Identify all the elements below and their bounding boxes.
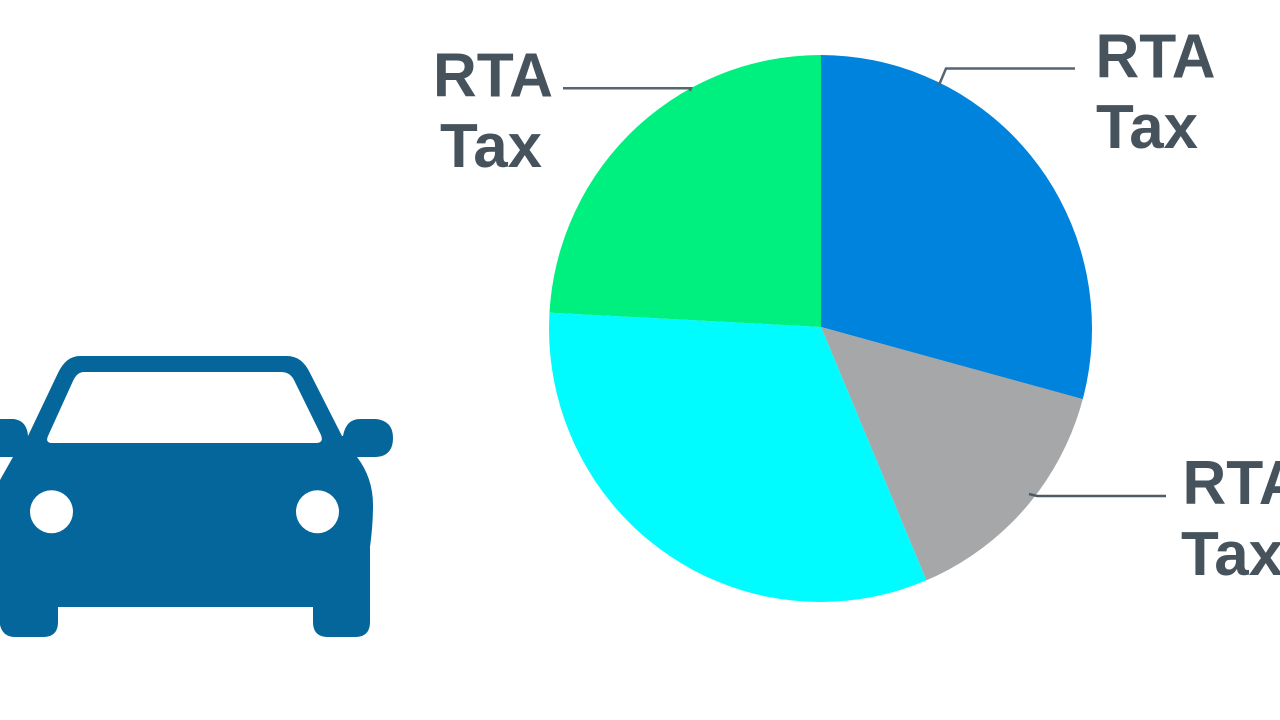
slice: green (550, 55, 821, 327)
label: top left: Tax (440, 112, 543, 181)
label: top right: RTA (1096, 22, 1216, 91)
label: bottom right (1181, 449, 1280, 589)
label: top left: RTA (433, 42, 553, 110)
leader line: top right (939, 68, 1075, 85)
icon: car (0, 356, 393, 637)
slice: gray (821, 327, 1083, 580)
pie chart (549, 55, 1092, 602)
label: top right: Tax (1096, 93, 1199, 162)
leader line: top left (563, 88, 691, 91)
leader line: bottom right (1029, 494, 1166, 496)
slice: blue (821, 55, 1092, 400)
slice: cyan (549, 312, 926, 602)
label: top right (1096, 22, 1216, 162)
label: top left (433, 42, 553, 181)
